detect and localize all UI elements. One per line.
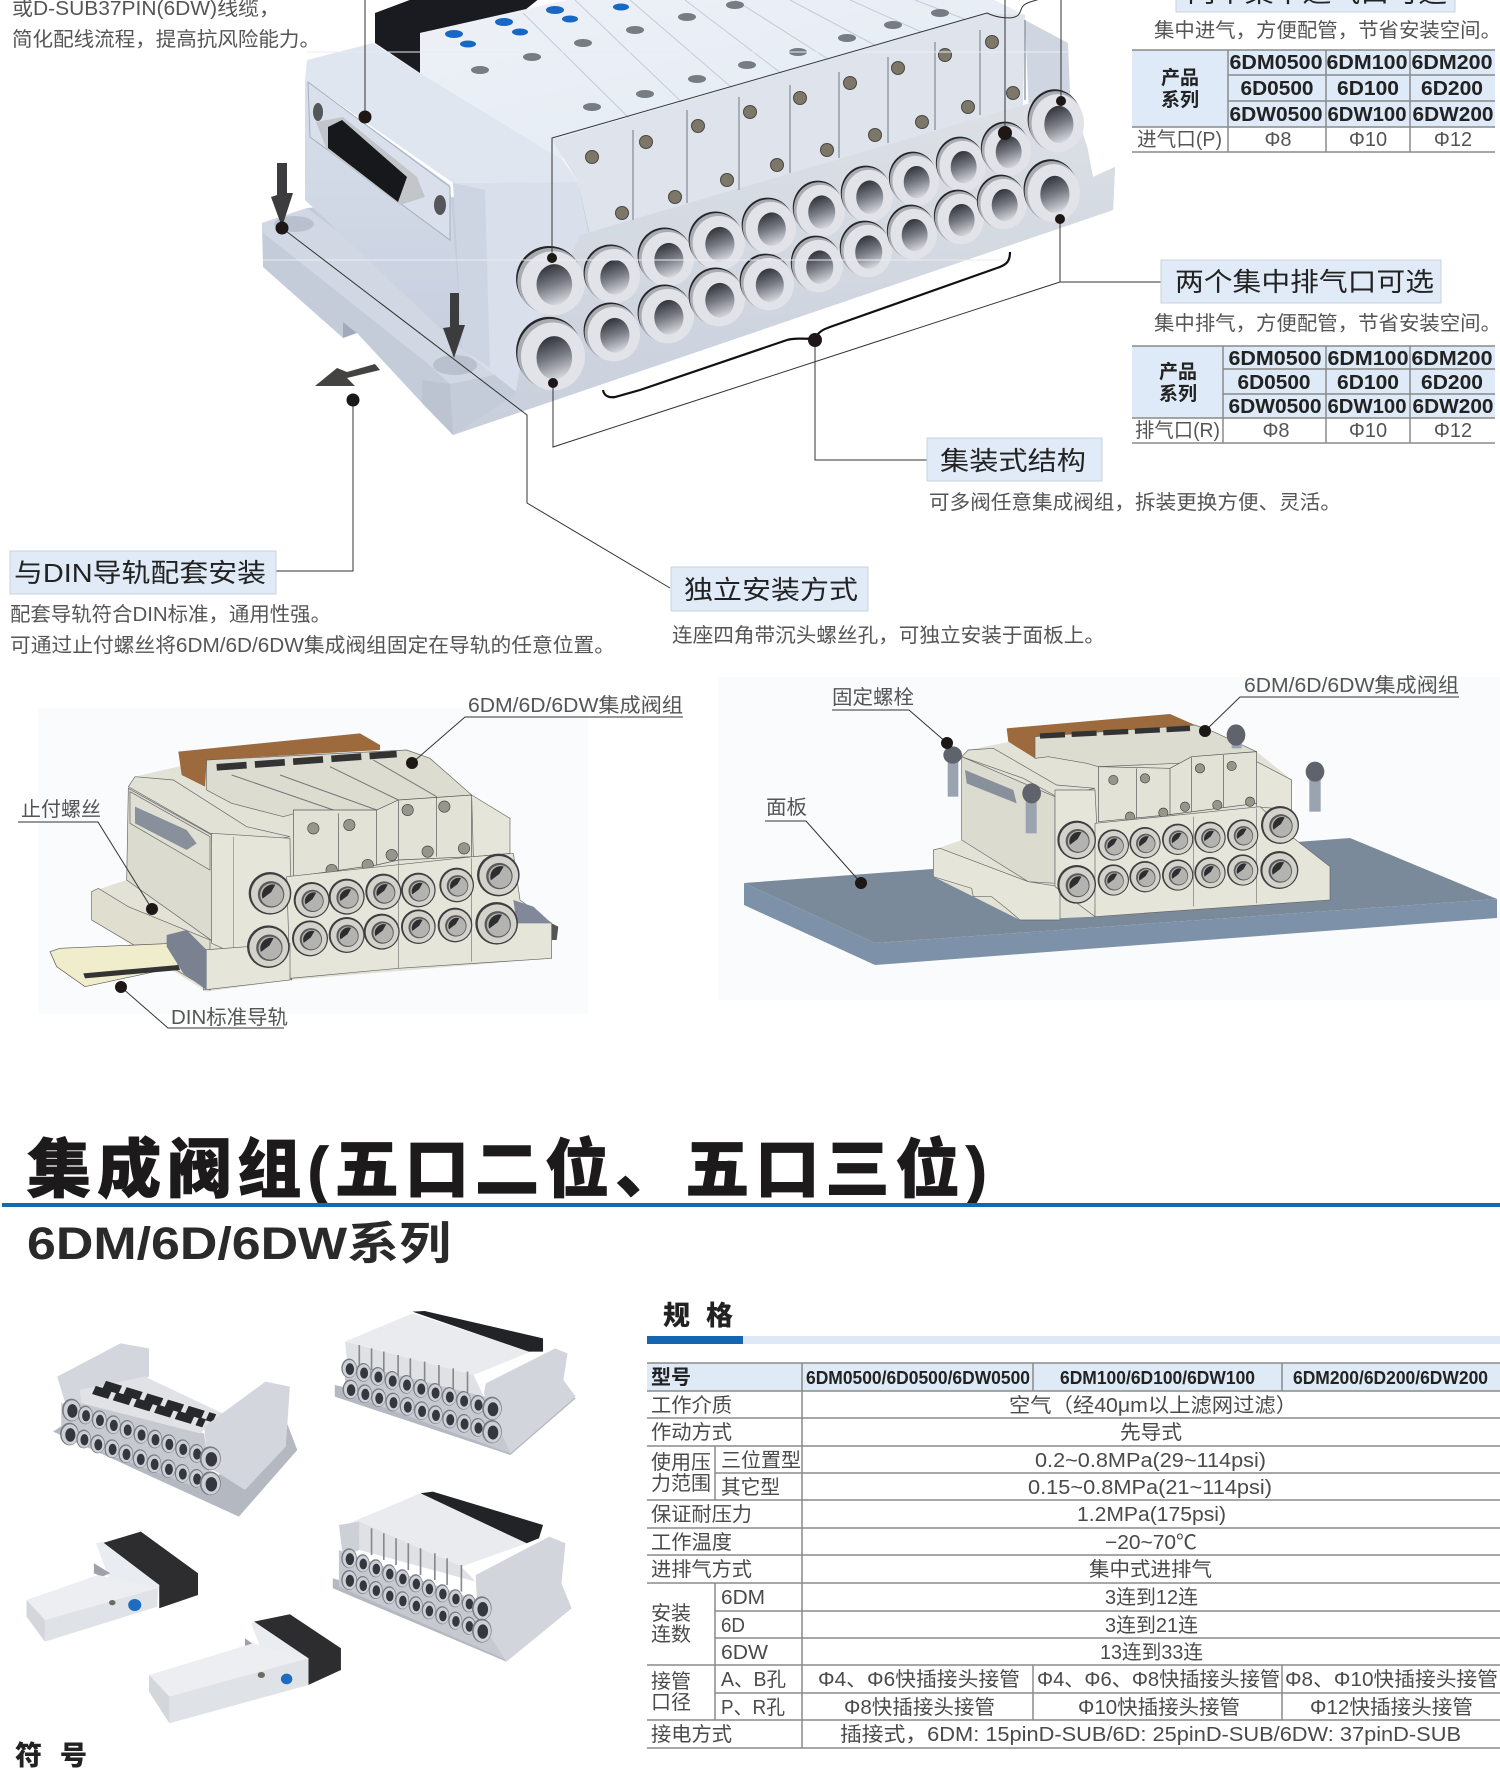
table: inlet port sizes: 6DM100 — [1326, 52, 1408, 74]
table values: Φ10快插接头接管 — [1078, 1696, 1240, 1719]
table row labels: 安装 — [651, 1602, 691, 1625]
table row labels: 三位置型 — [721, 1449, 801, 1472]
table values: 集中式进排气 — [1089, 1558, 1212, 1581]
table: exhaust port sizes: 6D100 — [1337, 372, 1399, 394]
table values: 插接式，6DM: 15pinD-SUB/6D: 25pinD-SUB/6DW: 37pinD-SUB — [840, 1723, 1461, 1746]
callout: independent mounting — [671, 567, 1105, 647]
callout: DIN rail label: DIN标准导轨 — [171, 1006, 288, 1029]
table: exhaust port sizes: 6DM200 — [1412, 348, 1492, 370]
table: exhaust port sizes: Φ12 — [1434, 420, 1472, 442]
table: exhaust port sizes: 6DM0500 — [1228, 348, 1322, 370]
table: inlet port sizes: 6DW0500 — [1230, 104, 1322, 126]
callout: independent mounting: 连座四角带沉头螺丝孔，可独立安装于面板上。 — [672, 624, 1105, 647]
table: inlet port sizes: 6D0500 — [1240, 78, 1314, 100]
panel: two central inlet ports — [1132, 0, 1500, 152]
table: inlet port sizes: 6DW200 — [1412, 104, 1494, 126]
table row labels: 接电方式 — [651, 1723, 732, 1746]
table: inlet port sizes — [1132, 50, 1495, 152]
table: exhaust port sizes — [1132, 346, 1495, 443]
text: inlet description: 集中进气，方便配管，节省安装空间。 — [1154, 19, 1500, 42]
table values: 13连到33连 — [1100, 1641, 1203, 1664]
table: exhaust port sizes: 6D0500 — [1238, 372, 1310, 394]
table row labels: 口径 — [651, 1691, 691, 1714]
table: inlet port sizes: Φ8 — [1264, 129, 1292, 151]
callout: DIN rail label — [115, 981, 288, 1029]
table values: 1.2MPa(175psi) — [1077, 1504, 1226, 1526]
photo: closed manifold, upper right — [335, 1311, 576, 1455]
subtitle: series: 6DM/6D/6DW系列 — [27, 1218, 451, 1269]
callout: set screw label: 止付螺丝 — [21, 798, 101, 821]
callout: fixing bolt label: 固定螺栓 — [832, 686, 914, 709]
illustration: DIN rail mounting diagram — [38, 708, 588, 1014]
table row labels: 其它型 — [721, 1476, 780, 1499]
table header: 型号 — [651, 1366, 691, 1389]
table: inlet port sizes: Φ12 — [1434, 129, 1472, 151]
black solenoid covers — [375, 0, 540, 73]
table row labels: 工作温度 — [651, 1531, 732, 1554]
callout: panel label: 面板 — [766, 796, 807, 819]
table values: Φ8、Φ10快插接头接管 — [1285, 1668, 1498, 1691]
table values: 3连到12连 — [1105, 1586, 1198, 1609]
table row labels: 作动方式 — [651, 1421, 732, 1444]
callout: valve manifold label (left): 6DM/6D/6DW集成阀组 — [468, 694, 683, 717]
product photos: manifold and valve variants — [27, 1311, 576, 1723]
heading: exhaust: 两个集中排气口可选 — [1175, 267, 1434, 297]
end block — [305, 80, 463, 350]
table row labels: 6DW — [721, 1642, 768, 1664]
table row labels: 力范围 — [651, 1472, 711, 1495]
callout: valve manifold label (right): 6DM/6D/6DW集成阀组 — [1244, 674, 1459, 697]
heading: specifications: 规 格 — [663, 1301, 733, 1331]
table: exhaust port sizes: 排气口(R) — [1135, 419, 1220, 442]
callout: DIN rail mounting — [10, 551, 615, 657]
table: exhaust port sizes: 6DW0500 — [1228, 396, 1322, 418]
callout: panel label — [765, 796, 867, 889]
table row labels: 连数 — [651, 1623, 691, 1646]
table: inlet port sizes: 系列 — [1161, 89, 1199, 111]
callout: valve manifold label (left) — [406, 694, 683, 769]
table row labels: 6DM — [721, 1587, 765, 1609]
table: specifications — [647, 1363, 1500, 1748]
table: exhaust port sizes: 6DM100 — [1328, 348, 1408, 370]
table: exhaust port sizes: 6DW100 — [1328, 396, 1406, 418]
table row labels: 保证耐压力 — [651, 1503, 752, 1526]
table values — [818, 1394, 1498, 1746]
heading: specifications — [647, 1301, 1500, 1344]
table: inlet port sizes: 6DW100 — [1328, 104, 1406, 126]
text block: D-SUB wiring note — [12, 0, 320, 51]
table: exhaust port sizes: Φ10 — [1349, 420, 1387, 442]
table header: 6DM0500/6D0500/6DW0500 — [806, 1368, 1030, 1388]
foot plate — [262, 150, 1115, 435]
table: exhaust port sizes: Φ8 — [1262, 420, 1290, 442]
valve top surface — [420, 0, 1025, 160]
heading: inlet — [1176, 0, 1455, 12]
callout: valve manifold label (right) — [1199, 674, 1459, 737]
table values: −20~70℃ — [1105, 1532, 1197, 1554]
table row labels: 进排气方式 — [651, 1558, 752, 1581]
illustration: panel mounting diagram — [718, 677, 1500, 1000]
table values: Φ4、Φ6快插接头接管 — [818, 1668, 1020, 1691]
table row labels — [651, 1394, 801, 1746]
table values: 0.2~0.8MPa(29~114psi) — [1035, 1450, 1266, 1472]
title: 集成阀组(五口二位、五口三位) — [27, 1134, 987, 1206]
callout: modular structure — [927, 438, 1341, 514]
table: exhaust port sizes: 6D200 — [1421, 372, 1483, 394]
table: inlet port sizes: 产品 — [1161, 67, 1199, 89]
table header: 6DM200/6D200/6DW200 — [1293, 1368, 1488, 1388]
arrow: down arrow left mounting hole — [271, 163, 293, 227]
callout: set screw label — [18, 798, 158, 915]
heading: exhaust — [1161, 260, 1441, 303]
table values: 空气（经40μm以上滤网过滤） — [1009, 1394, 1297, 1417]
D-sub connector — [316, 117, 425, 205]
table row labels: 接管 — [651, 1670, 691, 1693]
table: inlet port sizes: 6DM0500 — [1230, 52, 1322, 74]
photo: open manifold — [53, 1343, 297, 1517]
text: exhaust description: 集中排气，方便配管，节省安装空间。 — [1154, 312, 1500, 335]
table row labels: A、B孔 — [721, 1668, 786, 1691]
product photo: valve manifold — [262, 0, 1115, 435]
text block: D-SUB wiring note: 简化配线流程，提高抗风险能力。 — [12, 28, 320, 51]
callout: DIN rail mounting: 与DIN导轨配套安装 — [14, 558, 266, 588]
callout: independent mounting: 独立安装方式 — [684, 575, 858, 605]
table: inlet port sizes: 6D100 — [1337, 78, 1399, 100]
table: exhaust port sizes: 产品 — [1159, 361, 1197, 383]
photo: single valve, left — [27, 1532, 198, 1642]
callout: DIN rail mounting: 可通过止付螺丝将6DM/6D/6DW集成阀组固定在导轨的任意位置。 — [10, 634, 615, 657]
push-in ports — [516, 246, 585, 315]
photo: single valve, right — [149, 1614, 341, 1723]
callout: modular structure: 可多阀任意集成阀组，拆装更换方便、灵活。 — [929, 491, 1341, 514]
table row labels: 工作介质 — [651, 1394, 732, 1417]
table values: Φ8快插接头接管 — [844, 1696, 995, 1719]
table header — [651, 1366, 1488, 1389]
table row labels: P、R孔 — [721, 1696, 785, 1719]
valve front faces — [552, 13, 1025, 235]
table: inlet port sizes: 进气口(P) — [1137, 128, 1222, 151]
callout: DIN rail mounting: 配套导轨符合DIN标准，通用性强。 — [10, 603, 331, 626]
table: inlet port sizes: 6D200 — [1421, 78, 1483, 100]
manifold front — [453, 93, 1115, 435]
callout: modular structure: 集装式结构 — [940, 446, 1086, 476]
panel: two central exhaust ports — [1132, 260, 1500, 443]
table values: Φ4、Φ6、Φ8快插接头接管 — [1037, 1668, 1280, 1691]
photo highlight lines — [263, 52, 1070, 260]
table: exhaust port sizes: 6DW200 — [1412, 396, 1494, 418]
table row labels: 使用压 — [651, 1451, 711, 1474]
table: inlet port sizes: 6DM200 — [1412, 52, 1492, 74]
callout: fixing bolt label — [832, 686, 953, 749]
title rule — [2, 1203, 1500, 1207]
table: exhaust port sizes: 系列 — [1159, 383, 1197, 405]
table: inlet port sizes: Φ10 — [1349, 129, 1387, 151]
table values: Φ12快插接头接管 — [1310, 1696, 1473, 1719]
arrow: down arrow right mounting hole — [443, 293, 465, 358]
callout dots — [276, 96, 1066, 406]
table values: 先导式 — [1120, 1421, 1182, 1444]
photo: closed manifold, lower right — [333, 1492, 572, 1662]
table values: 0.15~0.8MPa(21~114psi) — [1028, 1477, 1272, 1499]
brace: manifold span — [603, 252, 1010, 397]
table header: 6DM100/6D100/6DW100 — [1060, 1368, 1255, 1388]
table row labels: 6D — [721, 1615, 745, 1637]
arrow: DIN rail slide direction — [315, 364, 380, 386]
callout leader lines — [276, 0, 1161, 588]
right end cap — [1025, 20, 1088, 150]
table values: 3连到21连 — [1105, 1614, 1198, 1637]
